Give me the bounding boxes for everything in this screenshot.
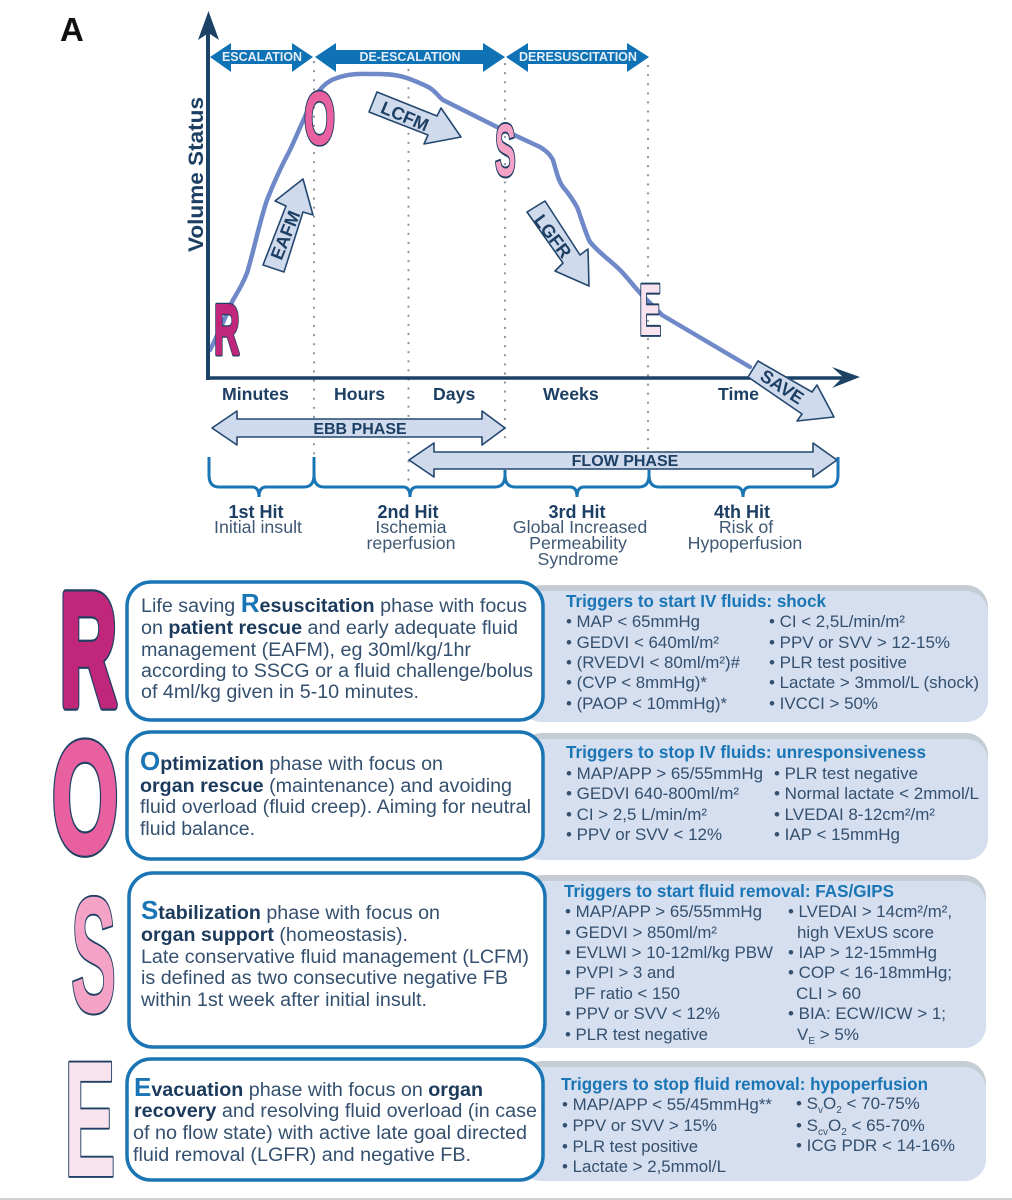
de-escalation arrow: DE-ESCALATION — [360, 50, 460, 64]
panel: R description: according to SSCG or a fluid challenge/bolus — [141, 660, 533, 682]
curve letter R: R — [214, 289, 240, 369]
panel: R description: of 4ml/kg given in 5-10 minutes. — [141, 681, 419, 703]
hit 1: Initial insult — [214, 517, 302, 537]
panel: triggers E: < 70-75% — [842, 1094, 920, 1113]
curve letter E: E — [639, 271, 661, 352]
panel: triggers O: • LVEDAI 8-12cm²/m² — [774, 805, 935, 824]
panel: triggers E: • Lactate > 2,5mmol/L — [562, 1157, 726, 1176]
panel: triggers S: • PVPI > 3 and — [565, 963, 675, 982]
hit 2 — [367, 502, 455, 553]
deresuscitation arrow — [506, 43, 649, 72]
panel: triggers S: • IAP > 12-15mmHg — [788, 943, 937, 962]
curve letter R: R — [214, 289, 240, 369]
flow phase arrow: FLOW PHASE — [572, 453, 679, 470]
panel: triggers S: • BIA: ECW/ICW > 1; — [788, 1004, 946, 1023]
panel: triggers E: < 65-70% — [847, 1116, 925, 1135]
arrow LCFM — [369, 92, 461, 144]
big letter O: O — [52, 709, 118, 886]
panel: triggers R: • (CVP < 8mmHg)* — [566, 673, 707, 692]
curve — [210, 74, 750, 367]
panel: O description: fluid overload (fluid creep). Aiming for neutral — [140, 796, 531, 818]
hit 3: Syndrome — [537, 549, 619, 569]
panel: triggers R: Triggers to start IV fluids: shock — [566, 591, 826, 611]
panel: triggers O: • Normal lactate < 2mmol/L — [774, 784, 979, 803]
panel: triggers R: • (PAOP < 10mmHg)* — [566, 694, 727, 713]
panel: S description — [129, 873, 545, 1047]
panel: triggers E: 2 — [836, 1105, 842, 1116]
panel: S description: Late conservative fluid management (LCFM) — [141, 946, 529, 968]
hit 4: Hypoperfusion — [688, 533, 802, 553]
panel: triggers E: 2 — [841, 1127, 847, 1138]
panel: R description — [127, 582, 543, 720]
hit 3 — [513, 502, 647, 569]
panel: triggers S — [520, 875, 986, 1048]
panel: triggers E: • S — [796, 1094, 818, 1113]
curve letter O: O — [304, 77, 335, 160]
panel: triggers S: • PLR test negative — [565, 1025, 708, 1044]
big letter S: S — [71, 863, 116, 1047]
escalation arrow — [210, 43, 313, 72]
panel: triggers S: • COP < 16-18mmHg; — [788, 963, 952, 982]
panel: O description: fluid balance. — [140, 818, 255, 840]
arrow EAFM — [263, 179, 313, 272]
arrow LGFR — [527, 201, 589, 286]
arrow LCFM: LCFM — [378, 97, 432, 135]
panel: triggers E: • MAP/APP < 55/45mmHg** — [562, 1095, 772, 1114]
panel: E description: recovery and resolving fluid overload (in case — [134, 1100, 537, 1122]
panel: E description — [127, 1059, 543, 1180]
big letter O: O — [52, 709, 118, 886]
panel: triggers S: E — [808, 1036, 815, 1047]
time axis labels: Hours — [334, 384, 385, 404]
panel: triggers R: • PPV or SVV > 12-15% — [769, 633, 950, 652]
arrow EAFM: EAFM — [267, 208, 304, 263]
panel: triggers E: • ICG PDR < 14-16% — [796, 1136, 955, 1155]
panel: triggers R: • IVCCI > 50% — [769, 694, 878, 713]
panel: triggers S: • PPV or SVV < 12% — [565, 1004, 720, 1023]
panel: triggers E: cv — [818, 1127, 828, 1138]
arrow SAVE — [748, 361, 834, 421]
panel: S description: organ support (homeostasis). — [141, 924, 408, 946]
ebb phase arrow — [212, 411, 505, 445]
panel: triggers O: • PLR test negative — [774, 764, 918, 783]
curve letter E: E — [639, 271, 661, 352]
panel: triggers S: Triggers to start fluid removal: FAS/GIPS — [564, 881, 894, 901]
panel: E description: Evacuation phase with focus on organ — [134, 1072, 483, 1102]
panel: triggers R: • (RVEDVI < 80ml/m²)# — [566, 653, 741, 672]
hit 4: Risk of — [719, 517, 773, 537]
panel: triggers R: • PLR test positive — [769, 653, 907, 672]
panel: R description: on patient rescue and early adequate fluid — [141, 617, 518, 639]
panel: triggers R: • MAP < 65mmHg — [566, 612, 700, 631]
panel: O description: organ rescue (maintenance) and avoiding — [140, 775, 512, 797]
panel: S description: within 1st week after initial insult. — [140, 989, 427, 1011]
arrow LGFR: LGFR — [530, 211, 575, 262]
panel: triggers S: > 5% — [815, 1025, 859, 1044]
panel: E description: of no flow state) with active late goal directed — [133, 1122, 527, 1144]
flow phase arrow — [409, 443, 837, 477]
panel: S description: Stabilization phase with focus on — [141, 895, 440, 925]
time axis labels — [222, 384, 759, 404]
hit 3: Permeability — [529, 533, 627, 553]
panel: triggers O: Triggers to stop IV fluids: unresponsiveness — [566, 742, 926, 762]
hit 2: reperfusion — [367, 533, 455, 553]
y axis label: Volume Status — [185, 97, 208, 252]
panel: triggers E: O — [823, 1094, 836, 1113]
panel: triggers S: high VExUS score — [797, 923, 934, 942]
deresuscitation arrow: DERESUSCITATION — [519, 50, 637, 64]
panel: triggers S: V — [797, 1025, 808, 1044]
arrow SAVE: SAVE — [757, 366, 807, 408]
big letter S: S — [71, 863, 116, 1047]
big letter R: R — [60, 560, 117, 739]
hit brackets — [209, 457, 838, 497]
hit 2: Ischemia — [375, 517, 447, 537]
panel: triggers E: • S — [796, 1116, 818, 1135]
escalation arrow: ESCALATION — [222, 50, 302, 64]
panel: R description: Life saving Resuscitation phase with focus — [141, 588, 527, 618]
panel: R description: management (EAFM), eg 30ml/kg/1hr — [141, 639, 471, 661]
hit 4 — [688, 502, 802, 553]
time axis labels: Minutes — [222, 384, 289, 404]
panel: triggers O — [520, 733, 988, 860]
time axis labels: Days — [433, 384, 475, 404]
panel: triggers S: • EVLWI > 10-12ml/kg PBW — [565, 943, 773, 962]
panel: triggers O: • PPV or SVV < 12% — [566, 825, 722, 844]
time axis labels: Weeks — [543, 384, 599, 404]
panel label A: A — [60, 11, 84, 48]
panel: triggers S: PF ratio < 150 — [574, 984, 680, 1003]
panel: S description: is defined as two consecutive negative FB — [141, 967, 508, 989]
panel: triggers O: • MAP/APP > 65/55mmHg — [566, 764, 763, 783]
panel: triggers E — [520, 1061, 986, 1181]
ebb phase arrow: EBB PHASE — [313, 421, 407, 438]
hit 1: 1st Hit — [228, 502, 284, 522]
hit 3: 3rd Hit — [548, 502, 606, 522]
y axis with arrow — [198, 11, 219, 380]
panel: triggers E: • PPV or SVV > 15% — [562, 1116, 717, 1135]
time axis labels: Time — [718, 384, 759, 404]
panel: triggers R — [520, 585, 988, 722]
panel: triggers E: v — [818, 1105, 823, 1116]
panel: O description: Optimization phase with focus on — [140, 746, 443, 776]
panel: triggers S: • MAP/APP > 65/55mmHg — [565, 902, 762, 921]
panel: triggers R: • GEDVI < 640ml/m² — [566, 633, 719, 652]
hit 3: Global Increased — [513, 517, 647, 537]
chart: volume status curve — [185, 11, 860, 490]
curve letter S: S — [495, 111, 516, 193]
panel: triggers E: O — [828, 1116, 841, 1135]
panel: triggers O: • CI > 2,5 L/min/m² — [566, 805, 707, 824]
panel: triggers S: • GEDVI > 850ml/m² — [565, 923, 717, 942]
curve letter S: S — [495, 111, 516, 193]
panel: triggers S: CLI > 60 — [796, 984, 861, 1003]
panel: triggers R: • Lactate > 3mmol/L (shock) — [769, 673, 979, 692]
hit 4: 4th Hit — [714, 502, 770, 522]
curve letter O: O — [304, 77, 335, 160]
panel: E description: fluid removal (LGFR) and negative FB. — [133, 1144, 471, 1166]
x axis with arrow — [206, 367, 860, 388]
panel: triggers O: • IAP < 15mmHg — [774, 825, 900, 844]
hit 1 — [214, 502, 302, 537]
hit 2: 2nd Hit — [378, 502, 439, 522]
panel: triggers R: • CI < 2,5L/min/m² — [769, 612, 905, 631]
panel: O description — [127, 732, 543, 859]
big letter R: R — [60, 560, 117, 739]
de-escalation arrow — [315, 43, 505, 72]
panel: triggers E: • PLR test positive — [562, 1137, 698, 1156]
panel: triggers S: • LVEDAI > 14cm²/m², — [788, 902, 952, 921]
panel: triggers O: • GEDVI 640-800ml/m² — [566, 784, 739, 803]
panel: triggers E: Triggers to stop fluid removal: hypoperfusion — [561, 1074, 928, 1094]
